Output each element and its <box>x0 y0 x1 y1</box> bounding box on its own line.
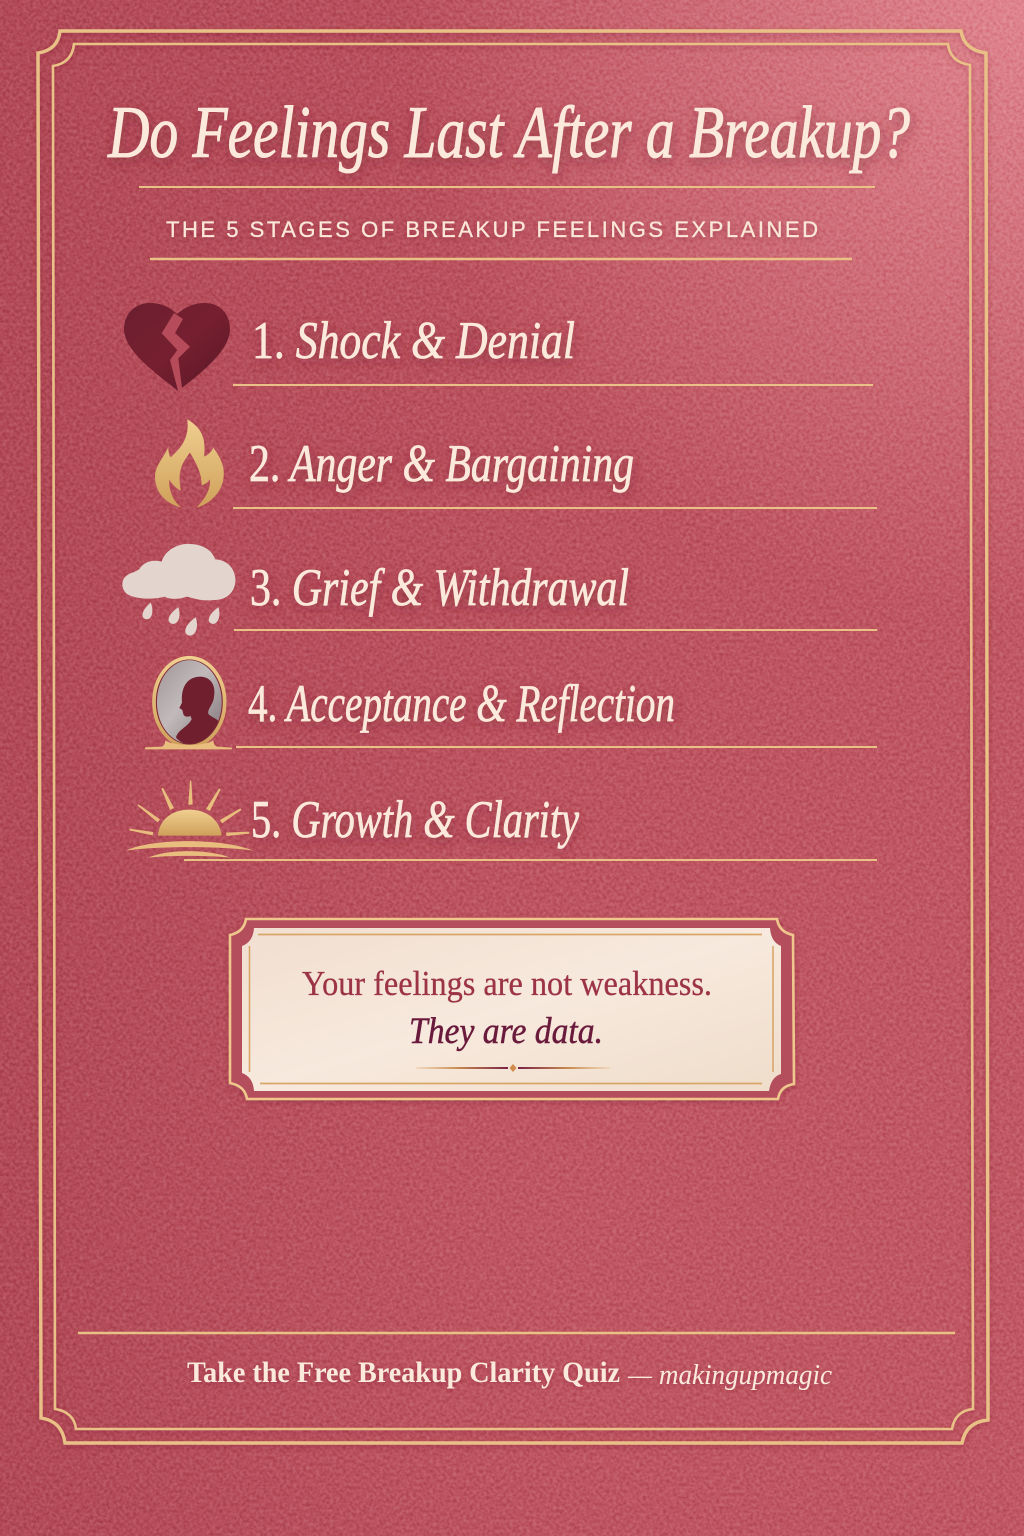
stage 1 rule <box>233 384 873 386</box>
icon: rising sun <box>126 781 253 858</box>
title rule <box>139 186 875 188</box>
icon: mirror with silhouette <box>145 658 232 749</box>
footer call to action: Take the Free Breakup Clarity Quiz <box>187 1356 620 1389</box>
callout outer frame <box>230 919 794 1099</box>
icon: broken heart <box>124 303 230 392</box>
callout inner rules <box>250 934 773 1084</box>
stage 2: anger and bargaining <box>155 419 877 508</box>
callout cream card <box>242 928 781 1091</box>
stage 5 rule <box>184 859 877 861</box>
stage 5: growth and clarity <box>126 781 877 860</box>
subtitle rule <box>150 258 852 260</box>
callout line 1: Your feelings are not weakness. <box>302 964 712 1003</box>
footer rule <box>78 1332 955 1334</box>
label: stage 1: 1. Shock & Denial <box>252 312 575 370</box>
stage 2 rule <box>233 507 877 509</box>
footer call to action: — makingupmagic <box>627 1359 832 1391</box>
label: stage 5: 5. Growth & Clarity <box>251 791 579 849</box>
stage 3: grief and withdrawal <box>122 544 877 636</box>
label: stage 3: 3. Grief & Withdrawal <box>250 559 629 617</box>
callout ornament <box>416 1064 610 1072</box>
icon: flame <box>155 419 224 508</box>
stage 4 rule <box>236 746 877 748</box>
label: stage 4: 4. Acceptance & Reflection <box>248 675 675 733</box>
subtitle: THE 5 STAGES OF BREAKUP FEELINGS EXPLAINED <box>166 217 818 242</box>
label: stage 2: 2. Anger & Bargaining <box>249 435 634 493</box>
stage 1: shock and denial <box>124 303 873 392</box>
stage 4: acceptance and reflection <box>145 658 877 749</box>
callout line 2: They are data. <box>409 1011 603 1052</box>
footer call to action <box>187 1356 832 1391</box>
callout panel <box>230 919 794 1099</box>
stage 3 rule <box>234 629 877 631</box>
icon: rain cloud <box>122 544 235 636</box>
